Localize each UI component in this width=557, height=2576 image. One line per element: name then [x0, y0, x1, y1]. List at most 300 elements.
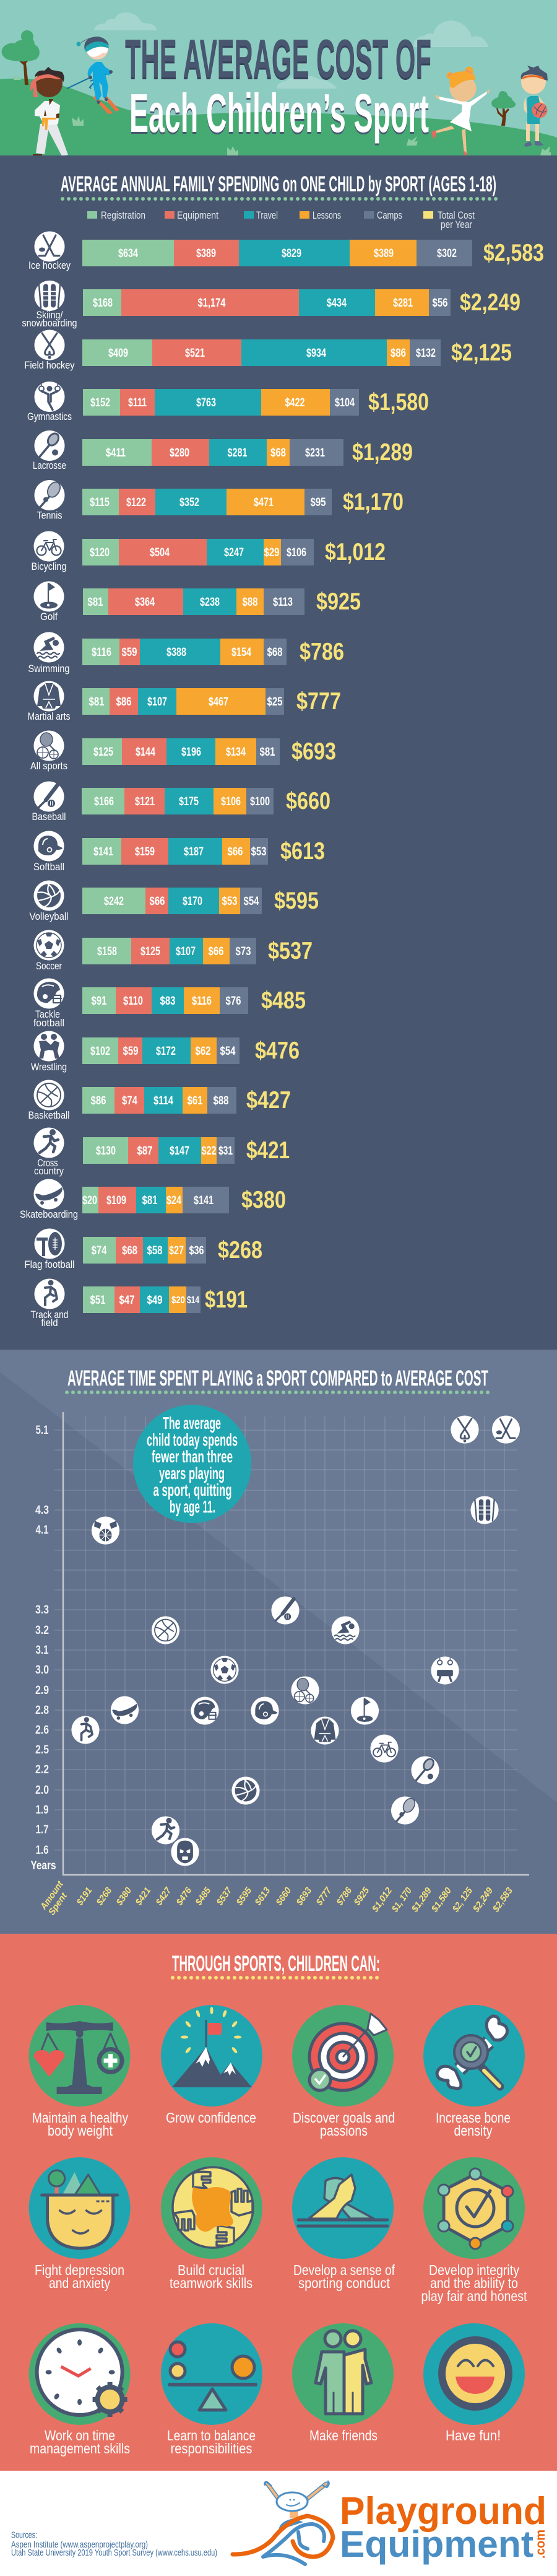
- sport: Gymnastics: $111: [128, 396, 147, 409]
- sport: Ice hockey: $389: [374, 247, 394, 260]
- tree left: [2, 30, 40, 85]
- x-axis labels: $613: [253, 1885, 273, 1908]
- y-axis labels: 4.3: [35, 1504, 49, 1517]
- sport: Field hockey: $934: [306, 347, 326, 360]
- sport: Track and field: $47: [119, 1294, 135, 1307]
- label: and anxiety: [49, 2275, 110, 2291]
- sport: Field hockey: $521: [185, 347, 205, 360]
- sport: Cross country: $130: [96, 1145, 116, 1158]
- sport: Wrestling: $59: [123, 1045, 139, 1058]
- sport: Tackle football: $76: [225, 995, 241, 1008]
- sport: Skateboarding: $380: [241, 1187, 286, 1213]
- label: Develop a sense of: [293, 2262, 395, 2278]
- sport: Softball: [33, 831, 325, 873]
- sport: Field hockey: $86: [391, 347, 406, 360]
- callout: average child: by age 11.: [170, 1497, 215, 1516]
- sport: Tennis: $122: [126, 496, 146, 509]
- sport: Track and field: [31, 1278, 248, 1329]
- sport: Flag football: $27: [169, 1244, 184, 1257]
- sport: Basketball: $86: [90, 1094, 106, 1107]
- label: Have fun!: [446, 2427, 501, 2443]
- sport: All sports: [30, 731, 336, 772]
- sport: Flag football: $36: [189, 1244, 204, 1257]
- label: [35, 2262, 124, 2291]
- sport: Golf: $113: [273, 596, 293, 609]
- title line 1: [125, 28, 431, 91]
- y-axis labels: 2.6: [35, 1724, 49, 1737]
- label: [167, 2427, 256, 2456]
- sport: All sports: $196: [181, 746, 201, 759]
- cloud right: [413, 20, 488, 47]
- label: Maintain a healthy: [32, 2110, 128, 2126]
- sport: Skateboarding: [20, 1179, 286, 1220]
- sport: Track and field: $51: [90, 1294, 106, 1307]
- x-axis labels: $1,580: [429, 1885, 454, 1915]
- sport: Cross country: Cross: [37, 1157, 58, 1169]
- benefit: have fun: [423, 2323, 525, 2443]
- x-axis labels: $925: [352, 1885, 372, 1908]
- label: passions: [320, 2123, 368, 2139]
- callout: average child: [133, 1405, 251, 1523]
- orange centre: [192, 2187, 233, 2232]
- panel: annual spending: [0, 155, 557, 1350]
- sport: Field hockey: $409: [108, 347, 128, 360]
- sport: Volleyball: $170: [183, 895, 202, 908]
- sport: Volleyball: $53: [222, 895, 238, 908]
- x-axis labels: $2,249: [470, 1885, 495, 1915]
- sport: Skiing/snowboarding: [22, 281, 520, 329]
- sport: Baseball: Baseball: [32, 811, 66, 823]
- y-axis labels: 2.8: [35, 1704, 49, 1717]
- sport: Soccer: $73: [235, 945, 251, 958]
- sport: Ice hockey: [28, 232, 544, 271]
- sport: Bicycling: $247: [224, 546, 244, 559]
- sport: Martial arts: $25: [267, 696, 283, 709]
- sport: Softball: $613: [280, 838, 325, 865]
- label: Build crucial: [178, 2262, 244, 2278]
- sport: Lacrosse: $1,289: [352, 439, 413, 466]
- legend: Camps: [377, 209, 402, 221]
- y-axis labels: 1.7: [36, 1823, 48, 1836]
- sport: Soccer: [33, 930, 313, 972]
- y-axis labels: 1.9: [36, 1804, 48, 1817]
- sport: Cross country: [33, 1127, 290, 1177]
- sport: Track and field: $14: [187, 1295, 199, 1306]
- sport: Flag football: $58: [147, 1244, 162, 1257]
- sport: Cross country: $22: [202, 1145, 217, 1158]
- x-axis labels: $595: [234, 1885, 254, 1908]
- sport: Cross country: $421: [246, 1137, 290, 1164]
- logo: Playground Equipment: [233, 2481, 548, 2565]
- sport: Tennis: [35, 480, 404, 522]
- sport: Track and field: field: [41, 1317, 58, 1329]
- sport: Martial arts: Martial arts: [27, 710, 71, 722]
- cloud middle: [277, 76, 337, 89]
- sport: Gymnastics: $1,580: [368, 389, 429, 416]
- sport: Skiing/snowboarding: $281: [393, 297, 413, 310]
- y-axis labels: 3.1: [36, 1644, 49, 1657]
- sport: Martial arts: $777: [296, 688, 341, 715]
- sport: Skateboarding: $109: [106, 1194, 126, 1207]
- logo: Playground Equipment: .com: [533, 2530, 548, 2559]
- sport: Lacrosse: $280: [170, 447, 189, 460]
- sport: Tackle football: $110: [123, 995, 143, 1008]
- sport: Wrestling: Wrestling: [31, 1061, 67, 1073]
- sport: Volleyball: $54: [244, 895, 259, 908]
- sport: Gymnastics: $152: [90, 396, 110, 409]
- sport: Golf: $925: [316, 588, 361, 615]
- sport: Skiing/snowboarding: $168: [93, 297, 113, 310]
- sport: Gymnastics: $104: [335, 396, 355, 409]
- legend: Lessons: [313, 209, 341, 221]
- skier child: [67, 37, 119, 114]
- sport: Lacrosse: Lacrosse: [33, 460, 66, 471]
- label: Grow confidence: [166, 2110, 256, 2126]
- footer: [0, 2471, 557, 2576]
- sport: Bicycling: $29: [264, 546, 280, 559]
- label: density: [454, 2123, 493, 2139]
- label: responsibilities: [171, 2440, 253, 2456]
- title: [125, 28, 431, 146]
- sport: Swimming: $68: [267, 646, 282, 659]
- label: Develop integrity: [429, 2262, 519, 2278]
- sport: Volleyball: $66: [150, 895, 165, 908]
- sport: Golf: $88: [243, 596, 257, 609]
- sport: Lacrosse: $68: [270, 447, 286, 460]
- sport: Lacrosse: [33, 430, 413, 471]
- x-axis labels: $1,289: [409, 1885, 434, 1915]
- label: [32, 2110, 128, 2139]
- scatter chart: [31, 1405, 529, 1918]
- benefit: time management: [29, 2323, 131, 2456]
- sport: Tackle football: $91: [92, 995, 107, 1008]
- karate child: [30, 67, 68, 162]
- sport: Tennis: $95: [311, 496, 326, 509]
- sport: Skiing/snowboarding: snowboarding: [22, 317, 77, 329]
- benefit: teamwork skills: [161, 2157, 262, 2291]
- callout: average child: The average: [163, 1413, 221, 1433]
- sport: Lacrosse: $281: [228, 447, 248, 460]
- legend: Travel: [256, 209, 278, 221]
- sport: Swimming: [28, 632, 344, 675]
- sport: Ice hockey: $2,583: [483, 240, 544, 266]
- x-axis labels: $476: [174, 1885, 194, 1908]
- sport: Soccer: Soccer: [36, 960, 62, 972]
- sport: Wrestling: $62: [196, 1045, 210, 1058]
- y-axis labels: 5.1: [36, 1424, 49, 1437]
- x-axis labels: Amount: [38, 1879, 66, 1912]
- sport: Wrestling: $476: [255, 1037, 300, 1064]
- y-axis labels: 2.2: [35, 1763, 49, 1776]
- chart markers: [71, 1415, 520, 1866]
- sport: Field hockey: $2,125: [451, 339, 512, 366]
- sport: Soccer: $125: [140, 945, 160, 958]
- right hand: [231, 2189, 253, 2216]
- sport: Skateboarding: $20: [82, 1194, 97, 1207]
- sport: Swimming: Swimming: [28, 663, 69, 675]
- sport: Baseball: [32, 782, 330, 823]
- sport: Gymnastics: $763: [196, 396, 216, 409]
- x-axis labels: $268: [94, 1885, 114, 1908]
- sport: Tackle football: $83: [160, 995, 176, 1008]
- cloud left: [94, 12, 157, 30]
- sport: Skiing/snowboarding: $2,249: [460, 289, 520, 316]
- sport: Golf: $238: [200, 596, 220, 609]
- y-axis labels: 3.3: [35, 1604, 49, 1617]
- x-axis labels: $693: [294, 1885, 314, 1908]
- heading: through sports: THROUGH SPORTS, CHILDREN CAN:: [172, 1952, 380, 1976]
- x-axis labels: $660: [274, 1885, 294, 1908]
- label: management skills: [30, 2440, 130, 2456]
- sport: Gymnastics: $422: [285, 396, 304, 409]
- sources: [11, 2530, 217, 2558]
- sport: Tennis: Tennis: [37, 509, 62, 522]
- y-axis labels: 1.6: [36, 1844, 48, 1857]
- y-axis labels: [31, 1424, 56, 1872]
- x-axis labels: $786: [334, 1885, 355, 1908]
- x-axis labels: $191: [74, 1885, 94, 1908]
- sport: All sports: $125: [93, 746, 113, 759]
- sport: Wrestling: [31, 1031, 300, 1073]
- sport: Soccer: $66: [208, 945, 224, 958]
- label: play fair and honest: [421, 2288, 527, 2304]
- sport: Tennis: $352: [179, 496, 199, 509]
- bottom hand: [217, 2225, 234, 2246]
- legend: Total Cost: [438, 209, 475, 221]
- sport: Skiing/snowboarding: $434: [327, 297, 347, 310]
- sport: All sports: $693: [291, 738, 336, 765]
- sport: Skateboarding: Skateboarding: [20, 1208, 78, 1220]
- sport: Field hockey: [25, 330, 512, 371]
- legend: per Year: [441, 219, 472, 230]
- sport: Tackle football: $116: [192, 995, 212, 1008]
- sport: Flag football: $74: [92, 1244, 107, 1257]
- sport: Flag football: $268: [218, 1237, 262, 1264]
- y-axis labels: 3.0: [35, 1664, 49, 1677]
- label: [293, 2262, 395, 2291]
- callout: average child: years playing: [159, 1464, 225, 1483]
- sport: Soccer: $537: [268, 938, 313, 964]
- sport: Gymnastics: [27, 382, 429, 422]
- sport: Track and field: Track and: [31, 1309, 68, 1321]
- sport: Skateboarding: $81: [142, 1194, 158, 1207]
- sport: Wrestling: $102: [90, 1045, 110, 1058]
- grass tufts: [14, 76, 551, 155]
- sport: All sports: $134: [226, 746, 246, 759]
- sport: Martial arts: $81: [89, 696, 105, 709]
- benefit: make friends: [292, 2323, 394, 2443]
- sport: Skiing/snowboarding: Skiing/: [36, 309, 63, 321]
- sport: Wrestling: $54: [220, 1045, 236, 1058]
- y-axis labels: 2.5: [35, 1744, 49, 1757]
- sport: Baseball: $175: [179, 795, 199, 808]
- label: Learn to balance: [167, 2427, 256, 2443]
- sport: Ice hockey: Ice hockey: [28, 260, 71, 271]
- sport: Tennis: $115: [90, 496, 110, 509]
- label: Work on time: [45, 2427, 115, 2443]
- sport: All sports: All sports: [30, 760, 67, 772]
- label: teamwork skills: [170, 2275, 253, 2291]
- logo figure: [233, 2481, 333, 2564]
- sport: Martial arts: $107: [147, 696, 167, 709]
- title line 2: [129, 82, 429, 146]
- sport: Ice hockey: $634: [118, 247, 138, 260]
- header illustration: [0, 0, 557, 162]
- sport: Golf: Golf: [40, 611, 58, 622]
- x-axis labels: $537: [214, 1885, 235, 1908]
- sport: Baseball: $106: [221, 795, 241, 808]
- sport: Gymnastics: Gymnastics: [27, 411, 72, 422]
- benefit: integrity: [421, 2157, 527, 2304]
- sport: Bicycling: $1,012: [325, 539, 386, 565]
- sport: Ice hockey: $302: [437, 247, 457, 260]
- x-axis labels: $380: [114, 1885, 134, 1908]
- x-axis labels: $1,012: [369, 1885, 394, 1915]
- x-axis labels: $421: [133, 1885, 153, 1908]
- sport: Cross country: $147: [170, 1145, 189, 1158]
- sport: Basketball: $427: [246, 1087, 291, 1114]
- sport: Field hockey: Field hockey: [25, 359, 75, 371]
- sport: Softball: $141: [93, 845, 113, 858]
- sport: Baseball: $100: [250, 795, 270, 808]
- sport: Bicycling: [31, 531, 386, 572]
- sport: Ice hockey: $389: [196, 247, 216, 260]
- sport: Basketball: $61: [187, 1094, 203, 1107]
- x-axis labels: $1, 170: [389, 1885, 414, 1915]
- sport: Volleyball: $242: [104, 895, 124, 908]
- sport: Lacrosse: $411: [106, 447, 126, 460]
- sport: Basketball: $88: [213, 1094, 229, 1107]
- label: [436, 2110, 511, 2139]
- panel: through sports: [0, 1934, 557, 2471]
- top hand: [193, 2172, 210, 2188]
- benefit: bone density: [423, 2005, 525, 2139]
- sport: Tackle football: Tackle: [35, 1008, 60, 1020]
- sport: Cross country: country: [34, 1165, 64, 1177]
- sport: Skiing/snowboarding: $1,174: [198, 297, 226, 310]
- gymnast child: [431, 67, 490, 158]
- sport: Flag football: [25, 1229, 262, 1270]
- axes: [63, 1412, 529, 1875]
- sport: Basketball: Basketball: [28, 1109, 69, 1121]
- label: Make friends: [309, 2427, 378, 2443]
- label: [293, 2110, 395, 2139]
- sport: Flag football: Flag football: [25, 1259, 74, 1270]
- x-axis labels: $2, 125: [450, 1885, 475, 1915]
- legend: [87, 209, 475, 230]
- benefit: sporting conduct: [292, 2157, 395, 2291]
- sources: Aspen Institute (www.aspenprojectplay.org): [11, 2539, 148, 2550]
- label: Increase bone: [436, 2110, 511, 2126]
- y-axis labels: Years: [31, 1859, 56, 1872]
- sport: Baseball: $121: [135, 795, 155, 808]
- sport: Golf: $81: [88, 596, 103, 609]
- logo wordmark: Playground: [340, 2490, 546, 2533]
- sport: Swimming: $59: [121, 646, 137, 659]
- label: body weight: [48, 2123, 113, 2139]
- sport: All sports: $81: [260, 746, 275, 759]
- logo: Playground Equipment: Equipment: [340, 2523, 533, 2565]
- panel: time vs cost: [0, 1350, 557, 1934]
- sport: Bicycling: $106: [287, 546, 306, 559]
- sport: Martial arts: [27, 681, 341, 722]
- x-axis labels: $777: [314, 1885, 334, 1908]
- sport: Skateboarding: $141: [194, 1194, 214, 1207]
- sport: Softball: Softball: [33, 861, 64, 873]
- sport: Swimming: $116: [92, 646, 111, 659]
- sport: Tackle football: $485: [261, 987, 306, 1014]
- y-axis labels: 4.1: [36, 1524, 49, 1537]
- legend: Registration: [101, 209, 145, 221]
- sport: Skateboarding: $24: [166, 1194, 181, 1207]
- x-axis labels: $2,583: [490, 1885, 515, 1915]
- label: Discover goals and: [293, 2110, 395, 2126]
- sport: Soccer: $158: [97, 945, 117, 958]
- benefit: fight depression: [29, 2157, 131, 2291]
- sport: Field hockey: $132: [416, 347, 436, 360]
- sport: Bicycling: $504: [150, 546, 170, 559]
- y-axis labels: 2.9: [35, 1684, 49, 1697]
- sport: Golf: [33, 581, 361, 622]
- hills: [0, 79, 557, 156]
- sport: Golf: $364: [135, 596, 155, 609]
- benefit: balance responsibilities: [161, 2323, 262, 2456]
- sport: Swimming: $786: [300, 639, 344, 665]
- callout: average child: fewer than three: [152, 1447, 233, 1466]
- label: [421, 2262, 527, 2304]
- benefit: healthy body weight: [29, 2005, 131, 2139]
- sport: Tennis: $471: [254, 496, 274, 509]
- callout: average child: a sport, quitting: [153, 1480, 231, 1500]
- sport: Cross country: $31: [218, 1145, 233, 1158]
- sport: Bicycling: $120: [90, 546, 110, 559]
- y-axis labels: 2.0: [35, 1784, 49, 1797]
- sport: Volleyball: Volleyball: [30, 910, 68, 922]
- sport: Softball: $187: [184, 845, 204, 858]
- sport: Flag football: $68: [122, 1244, 137, 1257]
- sport: Lacrosse: $231: [305, 447, 325, 460]
- sport: Basketball: $74: [122, 1094, 137, 1107]
- x-axis labels: [38, 1879, 515, 1918]
- label: [170, 2262, 253, 2291]
- tree right: [491, 91, 516, 126]
- sport: Volleyball: [30, 881, 319, 922]
- x-axis labels: $485: [193, 1885, 214, 1908]
- sport: Bicycling: Bicycling: [31, 561, 67, 572]
- x-axis labels: Spent: [46, 1890, 69, 1918]
- sport: Softball: $159: [135, 845, 155, 858]
- sport: All sports: $144: [136, 746, 155, 759]
- sport: Basketball: $114: [153, 1094, 173, 1107]
- benefit: discover goals: [292, 2005, 395, 2139]
- sport: Track and field: $49: [147, 1294, 162, 1307]
- label: and the ability to: [430, 2275, 518, 2291]
- sources: Utah State University 2019 Youth Sport Survey (www.cehs.usu.edu): [11, 2548, 217, 2558]
- sport: Tackle football: football: [33, 1017, 64, 1029]
- sources: Sources:: [11, 2530, 37, 2541]
- sport: Track and field: $20: [171, 1295, 185, 1306]
- x-axis labels: $427: [153, 1885, 174, 1908]
- sport: Skiing/snowboarding: $56: [432, 297, 448, 310]
- sport: Softball: $53: [251, 845, 266, 858]
- label: Fight depression: [35, 2262, 124, 2278]
- sport: Baseball: $166: [94, 795, 114, 808]
- sport: Ice hockey: $829: [282, 247, 301, 260]
- sport: Martial arts: $86: [116, 696, 131, 709]
- sport: Baseball: $660: [286, 788, 330, 814]
- sport: Basketball: [28, 1080, 291, 1121]
- sport: Tennis: $1,170: [343, 489, 404, 515]
